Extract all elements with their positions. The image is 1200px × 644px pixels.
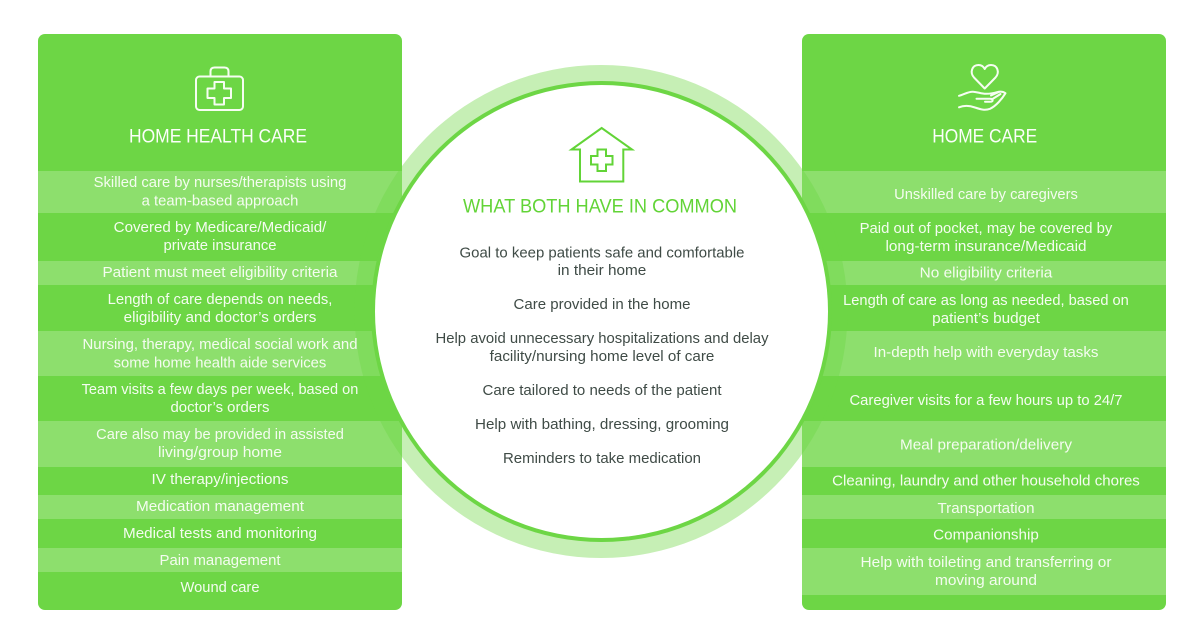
list: home care items: Help with toileting and transferring or xyxy=(860,555,1112,571)
list: home health care items: IV therapy/injections xyxy=(152,472,288,488)
panel: home care xyxy=(802,34,1166,610)
list: home care items: long-term insurance/Medicaid xyxy=(886,239,1086,255)
list: common items: Help avoid unnecessary hospitalizations and delay xyxy=(436,331,769,347)
list: home care items: moving around xyxy=(935,573,1037,589)
list: home health care items: Patient must meet eligibility criteria xyxy=(102,265,338,281)
list: home care items: Caregiver visits for a few hours up to 24/7 xyxy=(850,393,1122,409)
list: home care items: Unskilled care by caregivers xyxy=(894,187,1078,203)
striped row backgrounds xyxy=(38,171,402,572)
list: home health care items: private insurance xyxy=(164,238,276,254)
list: home health care items: Pain management xyxy=(160,553,280,569)
list: home care items: Length of care as long as needed, based on xyxy=(843,293,1129,309)
list: home health care items: Covered by Medicare/Medicaid/ xyxy=(114,220,327,236)
icon: heart over hand xyxy=(959,65,1006,110)
list: home health care items: Wound care xyxy=(180,580,260,596)
list: common items xyxy=(436,245,769,467)
list: home health care items: Team visits a few days per week, based on xyxy=(82,382,358,398)
list: home care items: Companionship xyxy=(933,528,1039,544)
striped row backgrounds xyxy=(802,171,1166,595)
list: home health care items: Medication management xyxy=(136,499,304,515)
list: home care items: Paid out of pocket, may be covered by xyxy=(860,221,1113,237)
list: home care items: Meal preparation/delivery xyxy=(900,438,1073,454)
list: home care items xyxy=(832,187,1140,589)
list: home care items: Transportation xyxy=(938,501,1034,517)
list: home health care items: Nursing, therapy, medical social work and xyxy=(82,337,358,353)
list: home health care items: Skilled care by nurses/therapists using xyxy=(94,175,346,191)
heading: what both have in common: WHAT BOTH HAVE IN COMMON xyxy=(463,196,737,217)
list: home health care items: eligibility and doctor’s orders xyxy=(124,310,316,326)
pale outer ring xyxy=(354,65,848,558)
list: home health care items: a team-based approach xyxy=(142,194,298,210)
list: home care items: No eligibility criteria xyxy=(920,266,1053,282)
list: home care items: In-depth help with everyday tasks xyxy=(874,345,1098,361)
list: home health care items: doctor’s orders xyxy=(170,400,270,416)
list: home health care items: some home health aide services xyxy=(114,356,326,372)
panel: home health care xyxy=(38,34,402,610)
icon: medical bag xyxy=(196,68,243,110)
list: common items: Help with bathing, dressing, grooming xyxy=(475,417,729,433)
icon: house with cross xyxy=(572,128,632,182)
list: common items: in their home xyxy=(558,263,646,279)
list: home health care items: Medical tests and monitoring xyxy=(123,526,317,542)
heading: home health care: HOME HEALTH CARE xyxy=(129,126,307,147)
list: common items: Care tailored to needs of the patient xyxy=(482,383,722,399)
list: common items: Care provided in the home xyxy=(514,297,690,313)
list: home health care items: Length of care depends on needs, xyxy=(108,292,332,308)
panel: what both have in common xyxy=(371,81,832,542)
heading: home care: HOME CARE xyxy=(932,126,1037,147)
list: common items: facility/nursing home level of care xyxy=(490,349,714,365)
list: home care items: Cleaning, laundry and other household chores xyxy=(832,474,1140,490)
list: common items: Goal to keep patients safe and comfortable xyxy=(460,245,744,261)
list: home health care items: living/group home xyxy=(158,445,282,461)
list: home health care items: Care also may be provided in assisted xyxy=(96,427,344,443)
list: home health care items xyxy=(82,175,358,596)
list: common items: Reminders to take medication xyxy=(503,451,701,467)
list: home care items: patient’s budget xyxy=(932,311,1040,327)
